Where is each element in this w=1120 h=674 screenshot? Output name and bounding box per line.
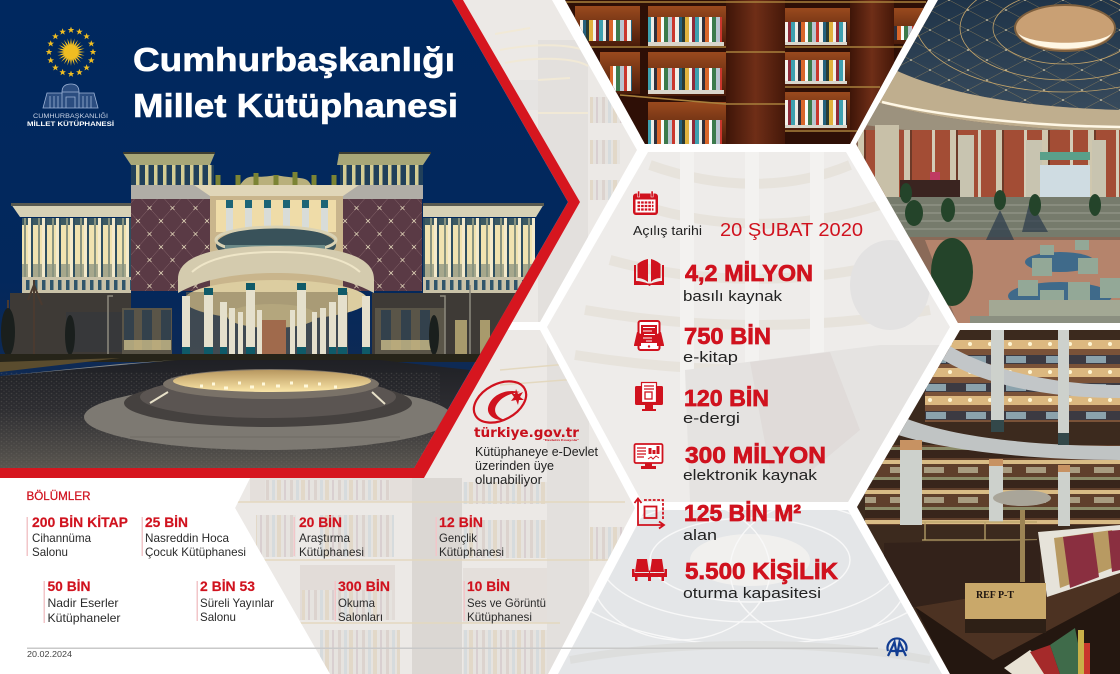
icon: türkiye.gov.tr emblem bbox=[467, 373, 533, 431]
stat: e-journals: e-dergi bbox=[683, 410, 740, 427]
centre facade bbox=[194, 172, 359, 295]
icon: palace outline bbox=[43, 84, 98, 108]
stat: floor area: alan bbox=[683, 527, 717, 544]
panel: pale upper bookshelf background bbox=[460, 0, 640, 325]
stat: opening date bbox=[633, 191, 863, 240]
footer rule bbox=[27, 648, 878, 649]
section: Okuma Salonları: Okuma bbox=[338, 596, 375, 610]
section: Okuma Salonları bbox=[334, 578, 390, 624]
stat: printed sources bbox=[634, 259, 813, 305]
right wing bbox=[372, 203, 544, 355]
section: Cihannüma Salonu: Salonu bbox=[32, 545, 68, 559]
note text: üzerinden üye bbox=[475, 459, 554, 473]
stat: opening date: Açılış tarihi bbox=[633, 224, 702, 238]
display panel bbox=[1038, 525, 1120, 597]
section: Araştırma: Araştırma bbox=[299, 531, 350, 545]
icon: calendar bbox=[633, 191, 658, 215]
front shelf bbox=[915, 592, 1120, 674]
stat: floor area: 125 BİN M² bbox=[684, 500, 801, 526]
shelf cells bbox=[575, 6, 640, 46]
section: Nasreddin Hoca bbox=[142, 514, 246, 559]
section: Cihannüma Salonu bbox=[26, 514, 128, 559]
section: Okuma Salonları: 300 BİN bbox=[338, 578, 390, 594]
reference sign: REF P-T bbox=[976, 589, 1015, 601]
section: Nasreddin Hoca: 25 BİN bbox=[145, 514, 188, 530]
panel: pale lower bookshelf background bbox=[230, 325, 640, 674]
carpeted floor bbox=[925, 240, 1120, 325]
icon: AA logo bbox=[888, 638, 906, 656]
section: Ses ve Görüntü: Ses ve Görüntü bbox=[467, 596, 546, 610]
section: Okuma Salonları: Salonları bbox=[338, 610, 383, 624]
section: Süreli Yayınlar: 2 BİN 53 bbox=[200, 578, 255, 594]
dark counter bbox=[884, 540, 1040, 607]
panel: central statistics background bbox=[540, 150, 960, 505]
section: Nadir Eserler bbox=[44, 578, 121, 625]
upper galleries bbox=[925, 340, 1120, 422]
stat: e-journals: 120 BİN bbox=[684, 385, 769, 411]
columns bbox=[900, 330, 1070, 526]
panel: pale dome background bbox=[558, 510, 942, 674]
stat: printed sources: 4,2 MİLYON bbox=[685, 260, 813, 286]
red chevron border bbox=[0, 0, 580, 478]
navy sky bbox=[0, 0, 568, 468]
stat: electronic sources: elektronik kaynak bbox=[683, 467, 818, 484]
panel: navy header with library photograph bbox=[0, 0, 580, 478]
section: Gençlik bbox=[436, 514, 504, 559]
columns bbox=[182, 290, 370, 354]
note text: Kütüphaneye e-Devlet bbox=[475, 445, 599, 459]
note text bbox=[475, 445, 599, 487]
section: Nasreddin Hoca: Nasreddin Hoca bbox=[145, 531, 229, 545]
lower reading level bbox=[865, 445, 1120, 525]
cornice bbox=[870, 70, 1120, 132]
logo wordmark: CUMHURBAŞKANLIĞI bbox=[33, 111, 108, 120]
towers bbox=[123, 152, 431, 291]
section: Ses ve Görüntü: 10 BİN bbox=[467, 578, 510, 594]
books bbox=[580, 20, 632, 41]
section: Cihannüma Salonu: Cihannüma bbox=[32, 531, 91, 545]
logo: Presidency Library bbox=[27, 27, 114, 128]
forecourt ground bbox=[0, 360, 470, 468]
photo: presidential library building bbox=[0, 152, 544, 468]
heading: BÖLÜMLER bbox=[26, 489, 91, 503]
section: Nadir Eserler: 50 BİN bbox=[48, 578, 90, 594]
section: Araştırma: Kütüphanesi bbox=[299, 545, 364, 559]
armchairs bbox=[1018, 240, 1120, 302]
title: Millet Kütüphanesi bbox=[133, 87, 458, 124]
stat: seating bbox=[632, 558, 838, 602]
wood columns bbox=[726, 0, 785, 144]
section: Gençlik: 12 BİN bbox=[439, 514, 483, 530]
terraced steps bbox=[880, 197, 1120, 237]
left wing bbox=[10, 203, 172, 355]
section: Gençlik: Kütüphanesi bbox=[439, 545, 504, 559]
books on lower shelf bbox=[1004, 628, 1090, 674]
stat: electronic sources bbox=[634, 442, 826, 484]
photo: bookshelves bbox=[560, 0, 930, 144]
section: Cihannüma Salonu: 200 BİN KİTAP bbox=[32, 514, 128, 530]
stat: e-journals bbox=[635, 382, 769, 427]
section: Araştırma: 20 BİN bbox=[299, 514, 342, 530]
photo: reading hall with dome bbox=[850, 0, 1120, 325]
fountain bbox=[84, 369, 452, 450]
logo: Presidency Library: MİLLET KÜTÜPHANESİ bbox=[27, 119, 114, 128]
reference sign bbox=[965, 583, 1046, 633]
stat: e-books: 750 BİN bbox=[684, 323, 771, 349]
stat: floor area bbox=[634, 498, 801, 544]
white wedge covering bottom left bbox=[0, 478, 330, 674]
trees and lamps bbox=[0, 280, 500, 372]
section: Nadir Eserler: Kütüphaneler bbox=[48, 611, 121, 625]
railing bbox=[922, 522, 1037, 540]
section: Ses ve Görüntü bbox=[464, 578, 546, 624]
section: Nadir Eserler: Nadir Eserler bbox=[48, 596, 119, 610]
note text: olunabiliyor bbox=[475, 473, 542, 487]
icon: monitor with charts bbox=[634, 444, 662, 469]
section: Gençlik: Gençlik bbox=[439, 531, 478, 545]
stat: electronic sources: 300 MİLYON bbox=[685, 442, 826, 468]
stat: seating: 5.500 KİŞİLİK bbox=[685, 558, 838, 584]
slogan: "Devletin Kısayolu" bbox=[543, 438, 580, 442]
stat: opening date: 20 ŞUBAT 2020 bbox=[720, 219, 863, 240]
icon: star ring bbox=[46, 27, 96, 77]
rotunda bbox=[178, 227, 374, 356]
section: Araştırma bbox=[294, 514, 364, 559]
panel: e-Devlet membership note bbox=[467, 373, 599, 487]
section: Süreli Yayınlar: Salonu bbox=[200, 610, 236, 624]
icon: area measure bbox=[634, 498, 664, 528]
lamp bbox=[1020, 510, 1025, 582]
bench bbox=[989, 300, 1120, 316]
stat: seating: oturma kapasitesi bbox=[683, 585, 821, 602]
title bbox=[133, 41, 458, 124]
date: 20.02.2024 bbox=[27, 649, 72, 659]
gold shelf lines bbox=[565, 2, 926, 131]
photo: library rotunda interior with reference shelf bbox=[855, 330, 1120, 674]
icon: open book bbox=[634, 259, 664, 286]
section: Süreli Yayınlar bbox=[196, 578, 274, 624]
walls and columns bbox=[858, 130, 1120, 198]
stat: printed sources: basılı kaynak bbox=[683, 288, 783, 305]
icon: monitor with journal bbox=[635, 382, 663, 411]
logo text: türkiye.gov.tr bbox=[474, 426, 580, 441]
dome ceiling bbox=[895, 0, 1120, 110]
section: Nasreddin Hoca: Çocuk Kütüphanesi bbox=[145, 545, 246, 559]
panel: key statistics bbox=[632, 191, 863, 602]
panel: library sections bbox=[26, 489, 546, 625]
section: Ses ve Görüntü: Kütüphanesi bbox=[467, 610, 532, 624]
plants bbox=[900, 183, 1101, 306]
title: Cumhurbaşkanlığı bbox=[133, 41, 455, 78]
stat: e-books: e-kitap bbox=[683, 349, 738, 366]
section: Süreli Yayınlar: Süreli Yayınlar bbox=[200, 596, 274, 610]
main balcony band bbox=[895, 418, 1120, 460]
stat: e-books bbox=[634, 321, 771, 366]
icon: theatre seats bbox=[632, 559, 667, 581]
icon: tablet in hands bbox=[634, 321, 664, 350]
